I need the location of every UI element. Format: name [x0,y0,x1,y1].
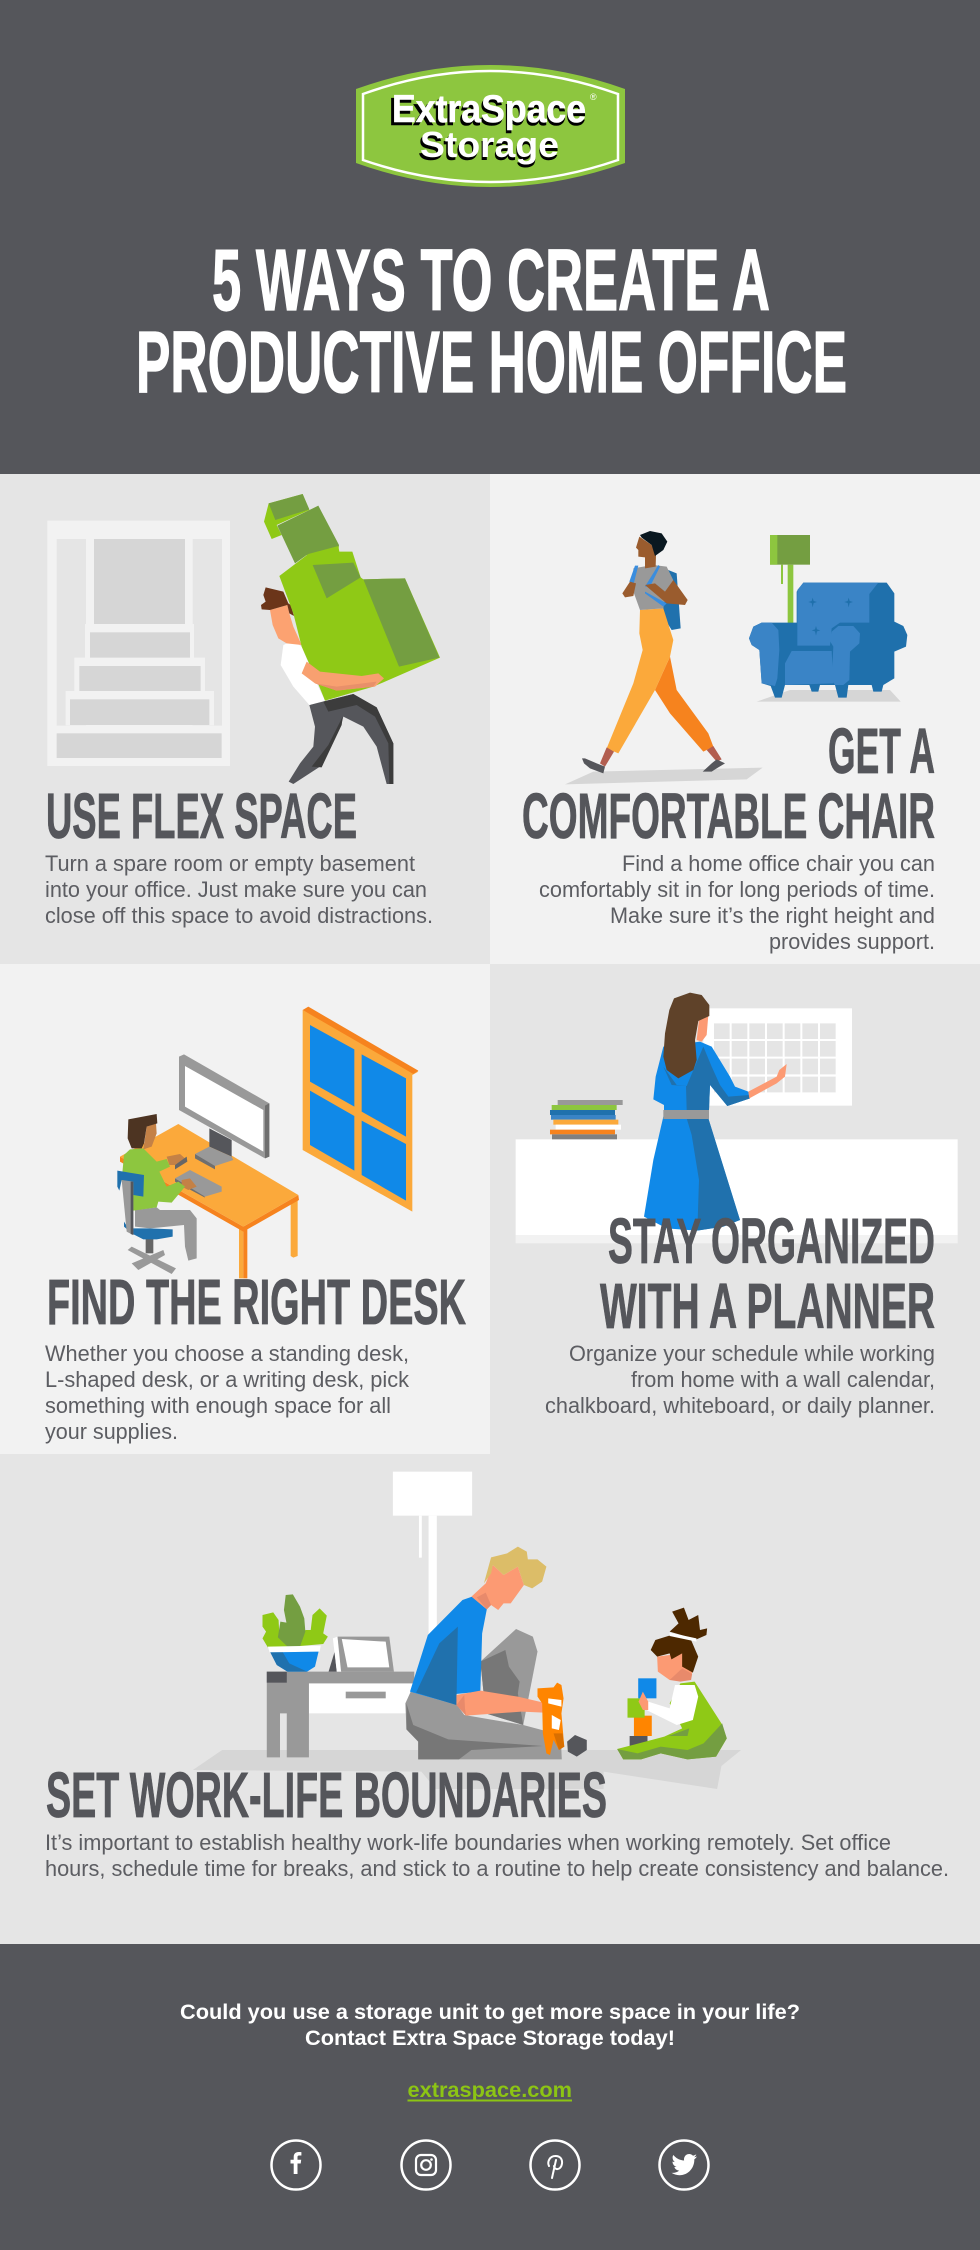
body text: close off this space to avoid distractions. [45,903,433,928]
illustration: floor lamp and floor [193,1472,741,1789]
panel: use flex space [0,474,490,964]
body text: Turn a spare room or empty basement [45,851,415,876]
illustration: staircase [47,521,230,766]
body text: something with enough space for all [45,1393,391,1418]
illustration: woman in blue dress [644,993,787,1231]
call to action: Contact Extra Space Storage today! [305,2026,675,2050]
body text: chalkboard, whiteboard, or daily planner. [545,1393,935,1418]
title [136,232,847,411]
body text: Organize your schedule while working [569,1341,935,1366]
illustration: child with blocks [617,1608,727,1759]
logo: Extra Space Storage [356,65,625,187]
illustration: wall calendar [703,1008,852,1106]
panel: comfortable chair [490,474,980,964]
icon: instagram [402,2140,450,2190]
footer panel [0,1944,980,2250]
heading [600,1205,935,1342]
body text [45,851,433,928]
body text [45,1341,410,1444]
illustration: walking woman [565,531,763,784]
call to action: Could you use a storage unit to get more space in your life? [180,2000,800,2024]
illustration: parent with toy [405,1547,587,1759]
heading: SET WORK-LIFE BOUNDARIES [46,1759,607,1831]
body text: hours, schedule time for breaks, and stick to a routine to help create consistency and balance. [45,1856,949,1881]
icon: pinterest [530,2140,580,2190]
header panel [0,0,980,474]
illustration: stack of books [550,1100,623,1139]
illustration: person at desk [117,1054,299,1278]
icon: facebook [272,2140,320,2190]
body text: Whether you choose a standing desk, [45,1341,409,1366]
body text [539,851,935,954]
panel: right desk [0,964,490,1454]
body text [45,1830,949,1881]
illustration: window [303,1007,418,1212]
panel: work-life boundaries [0,1454,980,1944]
heading: USE FLEX SPACE [46,780,357,852]
body text: It’s important to establish healthy work-life boundaries when working remotely. Set office [45,1830,891,1855]
icon: twitter [660,2140,708,2190]
illustration: man carrying boxes [261,494,440,784]
illustration: armchair and lamp [749,535,907,702]
logo: Extra Space Storage: ExtraSpace [392,88,586,131]
website link: extraspace.com [408,2078,572,2102]
logo: Extra Space Storage: ® [590,92,597,102]
body text: provides support. [769,929,935,954]
heading: FIND THE RIGHT DESK [47,1266,466,1338]
body text: your supplies. [45,1419,178,1444]
body text: Find a home office chair you can [622,851,935,876]
illustration: counter [516,1139,958,1243]
body text: Make sure it’s the right height and [610,903,935,928]
call to action [180,2000,800,2050]
body text: L-shaped desk, or a writing desk, pick [45,1367,410,1392]
illustration: desk with plant and laptop [262,1594,414,1757]
body text: from home with a wall calendar, [631,1367,935,1392]
body text: comfortably sit in for long periods of time. [539,877,935,902]
body text [545,1341,935,1418]
panel: planner [490,964,980,1454]
logo: Extra Space Storage: Storage [418,127,559,168]
logo: Extra Space Storage: Storage [420,124,559,165]
body text: into your office. Just make sure you can [45,877,427,902]
logo: Extra Space Storage: ExtraSpace [389,91,586,134]
heading [522,715,935,852]
